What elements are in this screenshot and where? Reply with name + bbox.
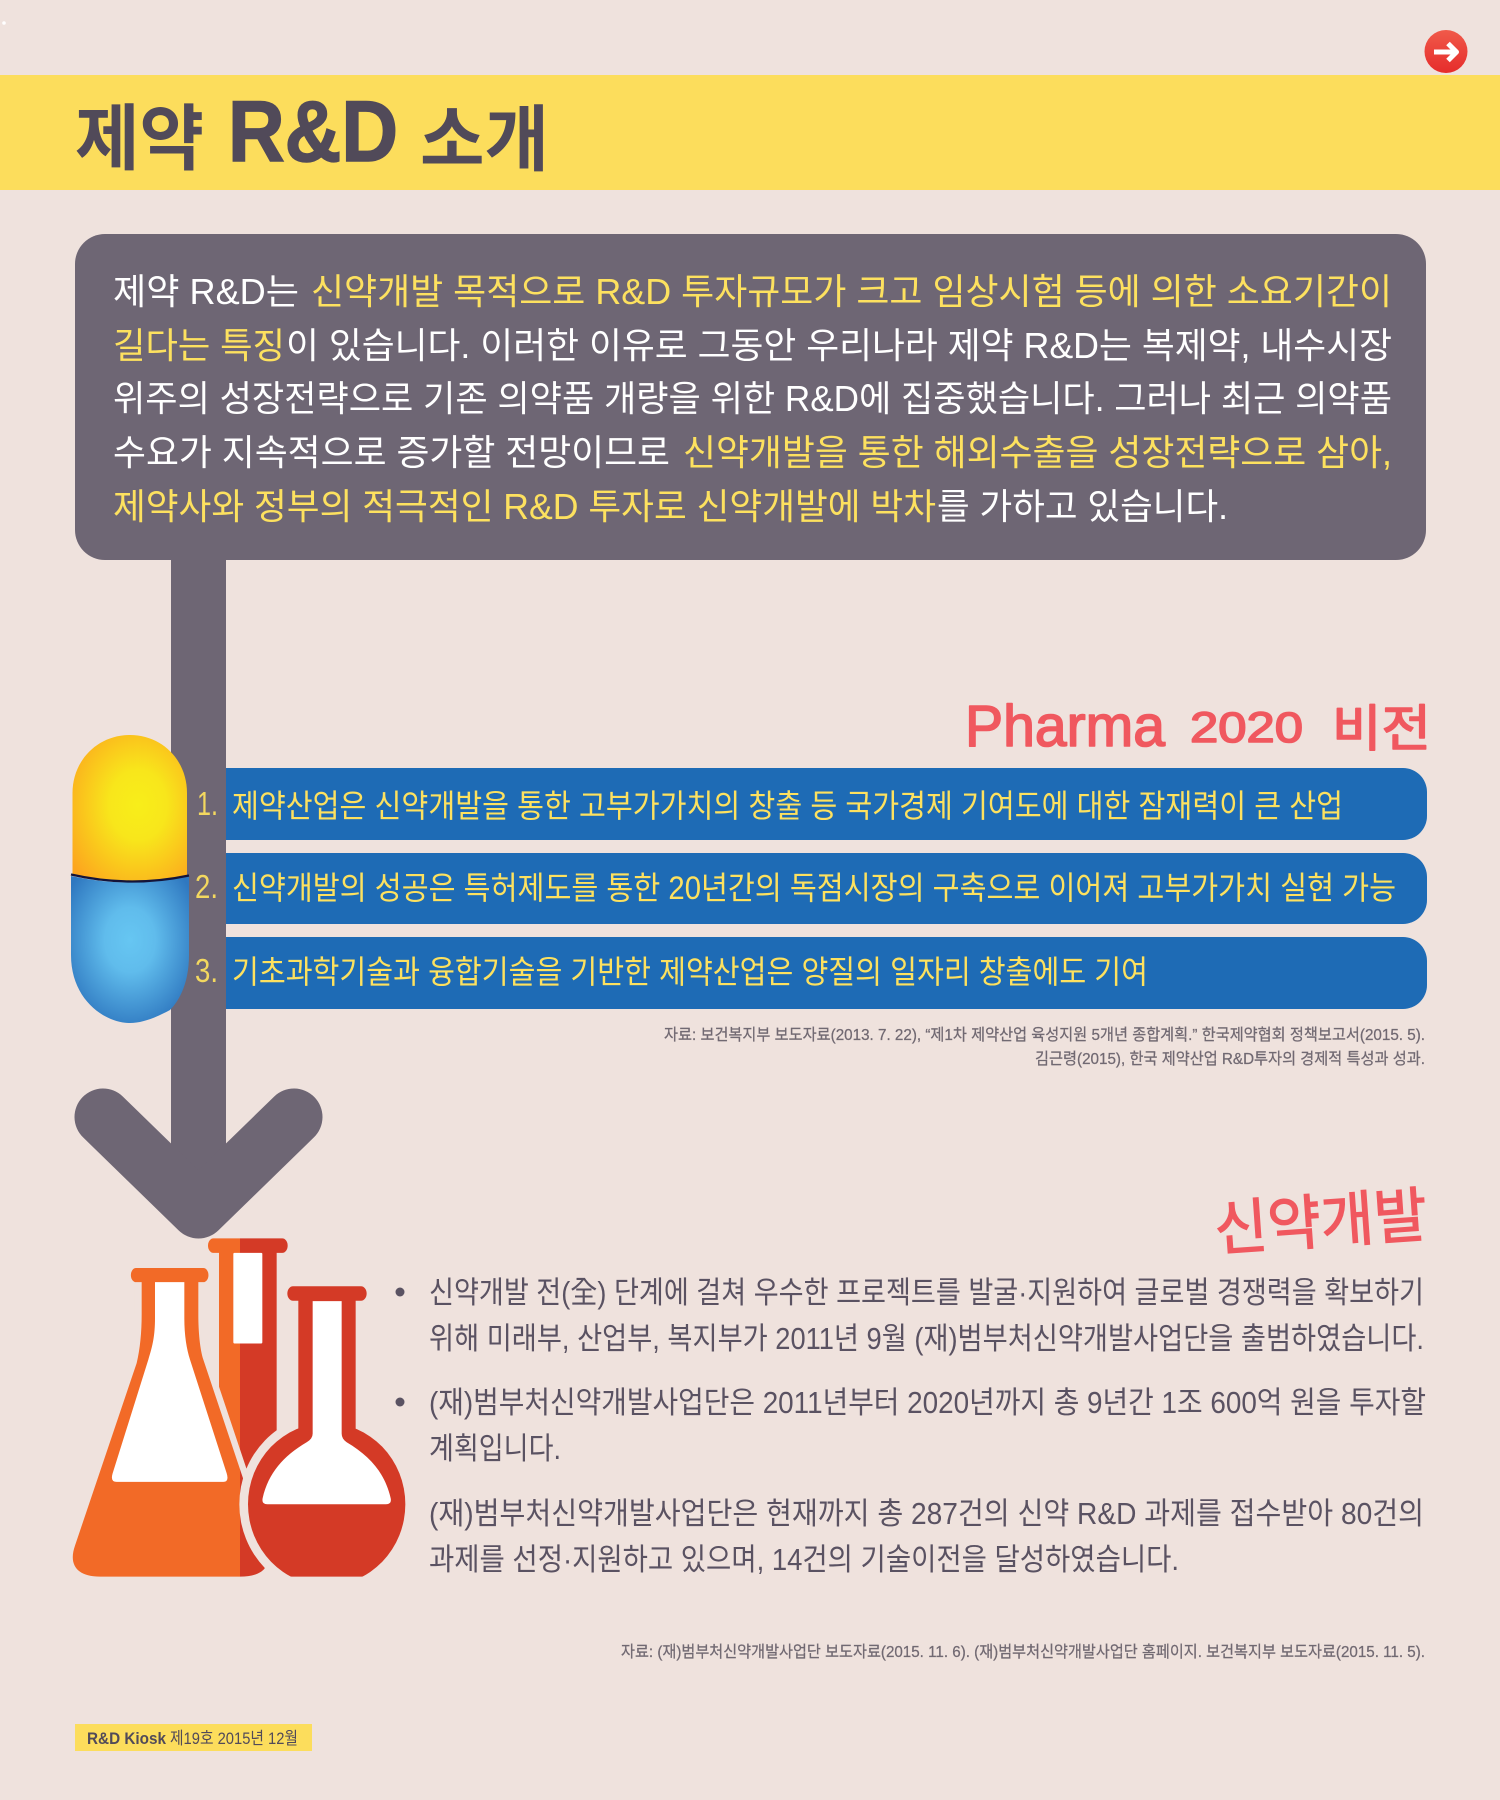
heading: Pharma 2020 vision [965,694,1431,759]
heading: new drug development: 신약개발 [1212,1182,1429,1263]
list numbers: 1. [197,785,218,822]
title: 소개 [420,101,549,181]
footer tag: R&D Kiosk [87,1729,166,1748]
bar 1: 제약산업은 신약개발을 통한 고부가가치의 창출 등 국가경제 기여도에 대한 잠재력이 큰 산업 [232,788,1343,824]
icon: next arrow button [1424,30,1468,73]
source note: development: 자료: (재)범부처신약개발사업단 보도자료(2015. 11. 6). (재)범부처신약개발사업단 홈페이지. 보건복지부 보도자료(2015. 11. 5). [621,1643,1425,1661]
bullet 1 [396,1276,1424,1356]
panel: introduction [75,234,1426,560]
bar 2 [226,853,1427,924]
intro paragraph: 제약 R&D는 [113,271,299,312]
title: R&D [228,84,398,180]
bar 3: 기초과학기술과 융합기술을 기반한 제약산업은 양질의 일자리 창출에도 기여 [232,954,1148,990]
intro paragraph [113,271,1392,527]
intro paragraph: 를 가하고 있습니다. [937,486,1228,527]
list numbers [195,785,218,989]
source note: vision: 김근령(2015), 한국 제약산업 R&D투자의 경제적 특성과 성과. [1035,1050,1425,1068]
conical flask [73,1268,268,1577]
source note: vision [664,1026,1425,1068]
arrow: stem and head linking the sections [103,540,294,1210]
paragraph 3 [429,1497,1424,1577]
bullet 2: (재)범부처신약개발사업단은 2011년부터 2020년까지 총 9년간 1조 600억 원을 투자할 [429,1386,1426,1420]
heading: Pharma 2020 vision: Pharma [965,694,1166,759]
intro paragraph: 제약사와 정부의 적극적인 R&D 투자로 신약개발에 박차 [113,486,936,527]
vision list bars [226,768,1427,1009]
intro paragraph: 신약개발을 통한 해외수출을 성장전략으로 삼아, [683,432,1392,473]
bar 3 [226,937,1427,1009]
bullet 2: 계획입니다. [429,1432,561,1466]
intro paragraph: 길다는 특징 [113,325,285,366]
heading: Pharma 2020 vision: 2020 [1190,704,1303,752]
bullet 2 [396,1386,1426,1466]
bullet text: new drug development [396,1276,1426,1577]
intro paragraph: 위주의 성장전략으로 기존 의약품 개량을 위한 R&D에 집중했습니다. 그러나 최근 의약품 [113,378,1392,419]
title banner [0,75,1500,190]
icon: lab flasks [73,1238,414,1595]
footer tag [75,1724,312,1751]
intro paragraph: 수요가 지속적으로 증가할 전망이므로 [113,432,670,473]
source note: vision: 자료: 보건복지부 보도자료(2013. 7. 22), “제1차 제약산업 육성지원 5개년 종합계획.” 한국제약협회 정책보고서(2015. 5). [664,1026,1425,1044]
list numbers: 3. [195,952,218,989]
heading: Pharma 2020 vision: 비전 [1332,701,1431,757]
footer tag: 제19호 2015년 12월 [170,1729,298,1748]
list numbers: 2. [195,868,218,905]
icon: capsule [71,735,189,1023]
title [75,84,549,181]
intro paragraph: 이 있습니다. 이러한 이유로 그동안 우리나라 제약 R&D는 복제약, 내수시장 [286,325,1392,366]
paragraph 3: (재)범부처신약개발사업단은 현재까지 총 287건의 신약 R&D 과제를 접수받아 80건의 [429,1497,1424,1531]
bar 2: 신약개발의 성공은 특허제도를 통한 20년간의 독점시장의 구축으로 이어져 고부가가치 실현 가능 [232,870,1396,906]
bar 1 [226,768,1427,840]
paragraph 3: 과제를 선정·지원하고 있으며, 14건의 기술이전을 달성하였습니다. [429,1543,1179,1577]
back test tube [208,1238,288,1468]
intro paragraph: 신약개발 목적으로 R&D 투자규모가 크고 임상시험 등에 의한 소요기간이 [311,271,1392,312]
round flask [239,1286,406,1577]
title: 제약 [75,100,204,180]
